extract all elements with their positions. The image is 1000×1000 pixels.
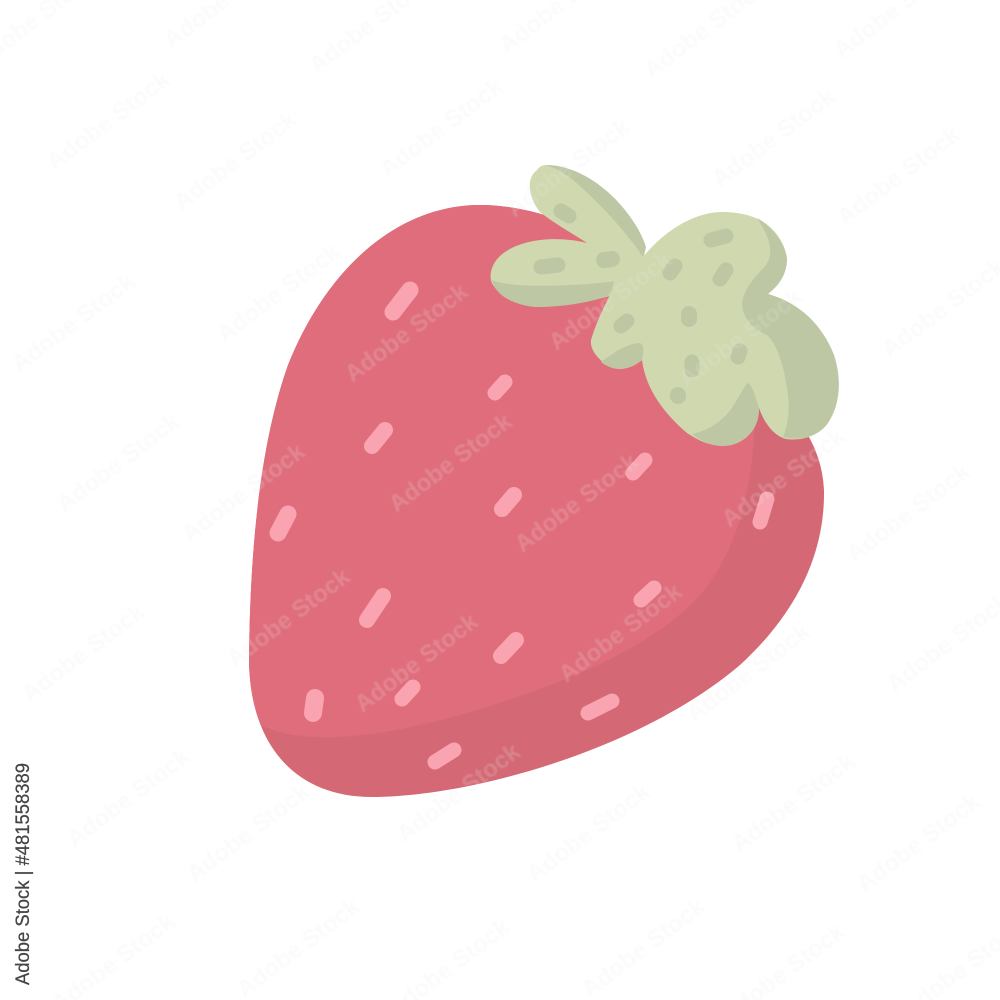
strawberry seeds — [278, 290, 767, 762]
watermark pattern: Adobe Stock — [232, 893, 366, 1000]
watermark pattern: Adobe Stock — [222, 563, 356, 673]
leaf spots — [541, 211, 740, 396]
watermark pattern: Adobe Stock — [375, 73, 509, 183]
watermark pattern: Adobe Stock — [727, 748, 861, 858]
watermark pattern: Adobe Stock — [62, 743, 196, 853]
watermark pattern: Adobe Stock — [52, 408, 186, 518]
strawberry calyx leaves — [491, 165, 839, 446]
watermark pattern: Adobe Stock — [212, 238, 346, 348]
watermark pattern: Adobe Stock — [182, 778, 316, 888]
watermark pattern: Adobe Stock — [682, 618, 816, 728]
watermark pattern: Adobe Stock — [502, 113, 636, 223]
watermark pattern: Adobe Stock — [707, 83, 841, 193]
watermark pattern: Adobe Stock — [392, 738, 526, 848]
watermark pattern: Adobe Stock — [522, 778, 656, 888]
watermark pattern: Adobe Stock — [169, 106, 303, 216]
watermark pattern: Adobe Stock — [577, 893, 711, 1000]
upper left leaf — [530, 165, 646, 270]
watermark pattern: Adobe Stock — [384, 408, 518, 518]
watermark pattern: Adobe Stock — [350, 608, 484, 718]
watermark pattern: Adobe Stock — [717, 423, 851, 533]
left leaf — [491, 239, 640, 307]
watermark pattern: Adobe Stock — [842, 458, 976, 568]
watermark pattern: Adobe Stock — [510, 448, 644, 558]
watermark pattern: Adobe Stock — [544, 246, 678, 356]
watermark pattern: Adobe Stock — [7, 268, 141, 378]
watermark pattern: Adobe Stock — [554, 578, 688, 688]
watermark pattern: Adobe Stock — [17, 598, 151, 708]
watermark pattern: Adobe Stock — [832, 121, 966, 231]
watermark pattern: Adobe Stock — [674, 283, 808, 393]
main leaf — [591, 212, 839, 446]
watermark pattern: Adobe Stock — [340, 278, 474, 388]
watermark pattern: Adobe Stock — [177, 438, 311, 548]
stock id caption: Adobe Stock | #481558389 — [13, 763, 34, 985]
watermark pattern: Adobe Stock — [852, 788, 986, 898]
watermark pattern: Adobe Stock — [42, 66, 176, 176]
strawberry body — [249, 205, 824, 797]
strawberry illustration canvas — [14, 165, 839, 986]
